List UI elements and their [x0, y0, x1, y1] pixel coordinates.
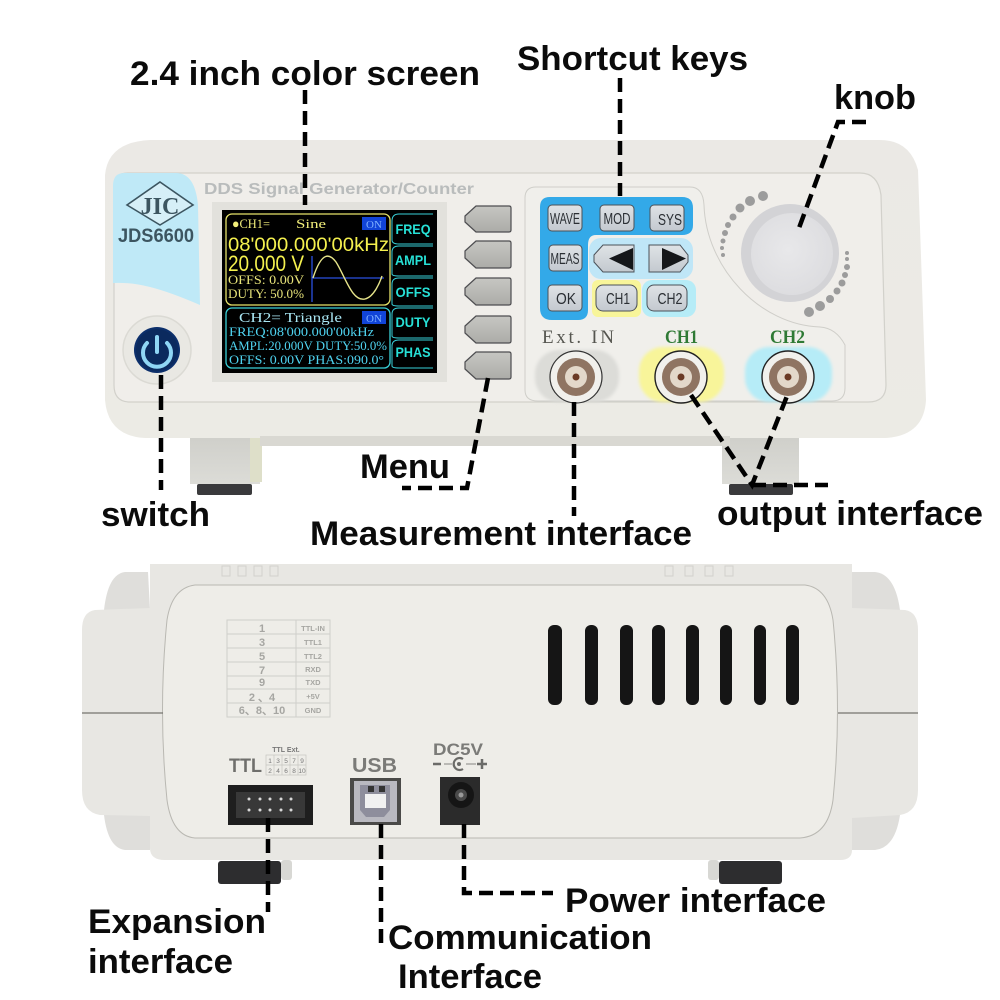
screen bezel — [212, 202, 447, 382]
key: CH1: CH1 — [606, 291, 630, 308]
on-screen menu labels: AMPL — [395, 252, 431, 268]
CH2 panel: ON — [366, 313, 382, 325]
key: WAVE — [548, 205, 582, 231]
logo diamond: JIC — [141, 194, 179, 220]
pin assignment table: TTL-IN — [301, 624, 325, 633]
pin assignment table: 3 — [259, 637, 265, 649]
pin assignment table: 9 — [259, 677, 265, 689]
callout: communication interface: Communication — [388, 919, 652, 957]
CH1 panel: ON — [366, 219, 382, 231]
on-screen menu labels: DUTY — [396, 314, 431, 330]
key: CH2 — [647, 285, 687, 311]
rear casing — [82, 564, 918, 860]
callout: power interface: Power interface — [565, 882, 826, 920]
rear panel — [162, 585, 838, 838]
TTL pin numbering grid: 10 — [298, 768, 306, 775]
TTL label: TTL — [229, 756, 262, 777]
pin assignment table — [227, 620, 330, 717]
knob scale dots — [720, 191, 850, 317]
key: right arrow — [649, 245, 688, 272]
key: SYS — [650, 205, 684, 231]
key: CH1 — [596, 285, 637, 311]
callout: expansion interface: interface — [88, 943, 233, 981]
USB port — [350, 778, 401, 825]
on-screen menu labels: OFFS — [396, 284, 430, 300]
pin assignment table: 7 — [259, 665, 265, 677]
TTL pin numbering grid — [266, 747, 306, 775]
rear corner bumpers — [104, 572, 900, 850]
CH1 BNC connector — [639, 347, 724, 403]
CH2 connector label: CH2 — [770, 327, 805, 348]
TTL pin numbering grid: 6 — [284, 768, 288, 775]
on-screen menu labels — [392, 214, 433, 368]
CH2 panel: FREQ:08'000.000'00kHz — [229, 324, 374, 339]
key: left arrow — [594, 245, 634, 272]
CH1 panel: 20.000 V — [228, 251, 304, 276]
knob and keypad recess outline — [525, 187, 845, 401]
callout: output interface: output interface — [717, 495, 983, 533]
key: MOD: MOD — [604, 211, 630, 228]
on-screen menu labels: FREQ — [396, 221, 431, 237]
CH1 panel: DUTY: 50.0% — [228, 286, 304, 301]
key: MEAS — [549, 245, 582, 271]
TTL pin numbering grid: 4 — [276, 768, 280, 775]
callout: power interface — [464, 824, 826, 920]
CH2 panel: CH2= Triangle — [239, 310, 342, 325]
callout: communication interface — [381, 824, 652, 996]
sine chart — [312, 256, 384, 302]
TTL pin numbering grid: 2 — [268, 768, 272, 775]
pin assignment table: 6、8、10 — [239, 705, 285, 717]
rear top vent tabs — [222, 566, 733, 576]
shortcut key block — [540, 197, 696, 320]
callout: expansion interface: Expansion — [88, 903, 266, 941]
DC power jack — [440, 777, 480, 825]
TTL pin numbering grid: 9 — [300, 758, 304, 765]
pin assignment table: 2 、4 — [249, 692, 276, 704]
callout: 2.4 inch color screen: 2.4 inch color screen — [130, 55, 480, 93]
Ext. IN label: Ext. IN — [542, 327, 614, 348]
rear view of the signal generator — [82, 564, 918, 884]
TTL pin numbering grid: TTL Ext. — [272, 747, 300, 754]
CH1 panel: Sine — [296, 216, 326, 231]
rear right foot — [708, 860, 782, 884]
USB label: USB — [352, 755, 397, 777]
pin assignment table: +5V — [306, 692, 320, 701]
pin assignment table: TTL1 — [304, 638, 322, 647]
callout: communication interface: Interface — [398, 958, 542, 996]
pin assignment table: GND — [305, 706, 322, 715]
device title: DDS Signal Generator/Counter — [204, 181, 474, 198]
callout: expansion interface — [88, 818, 268, 981]
callout: switch: switch — [101, 496, 210, 534]
CH1 panel: OFFS: 0.00V — [228, 272, 305, 287]
rear left foot — [218, 860, 292, 884]
DC5V label: DC5V — [433, 740, 484, 759]
TTL pin numbering grid: 8 — [292, 768, 296, 775]
CH2 panel — [226, 308, 390, 368]
CH1 connector label: CH1 — [665, 327, 698, 348]
callout: menu: Menu — [360, 448, 450, 486]
casing seam lines — [82, 712, 918, 714]
callout: knob: knob — [834, 79, 916, 117]
TTL pin numbering grid: 1 — [268, 758, 272, 765]
pin assignment table: TTL2 — [304, 652, 322, 661]
pin assignment table: 1 — [259, 623, 265, 635]
colour screen — [222, 210, 437, 373]
key: OK — [548, 285, 582, 311]
power button — [123, 316, 191, 384]
key: MOD — [600, 205, 634, 231]
right front foot — [722, 436, 799, 495]
CH1 panel: ●CH1= — [232, 216, 270, 231]
Ext. IN BNC connector — [535, 350, 619, 403]
model name: JDS6600 — [118, 226, 194, 247]
front view of the signal generator — [105, 140, 926, 495]
rotary knob — [720, 191, 850, 317]
CH2 BNC connector — [745, 347, 832, 403]
key: OK: OK — [556, 291, 576, 308]
pin assignment table: TXD — [306, 678, 321, 687]
callout: shortcut keys: Shortcut keys — [517, 40, 748, 78]
CH1 panel — [226, 214, 390, 305]
TTL expansion connector — [228, 785, 313, 825]
callout: menu — [360, 378, 488, 488]
blue logo area — [113, 173, 200, 305]
key: MEAS: MEAS — [550, 251, 580, 268]
left front foot — [190, 436, 262, 495]
front casing — [105, 140, 926, 438]
callout: knob — [799, 79, 916, 228]
CH1 panel: 08'000.000'00kHz — [228, 235, 389, 256]
pin assignment table: RXD — [305, 665, 321, 674]
ventilation slots — [548, 625, 799, 705]
TTL pin numbering grid: 5 — [284, 758, 288, 765]
callout: output interface — [691, 395, 983, 533]
pin assignment table: 5 — [259, 651, 265, 663]
front panel — [114, 173, 886, 402]
menu soft keys — [465, 206, 511, 379]
key: CH2: CH2 — [658, 291, 683, 308]
on-screen menu labels: PHAS — [396, 344, 430, 360]
TTL pin numbering grid: 7 — [292, 758, 296, 765]
callout: measurement interface: Measurement interface — [310, 515, 692, 553]
CH2 panel: AMPL:20.000V DUTY:50.0% — [229, 338, 387, 353]
TTL pin numbering grid: 3 — [276, 758, 280, 765]
key: WAVE: WAVE — [550, 211, 580, 228]
CH2 panel: OFFS: 0.00V PHAS:090.0° — [229, 352, 384, 367]
key: SYS: SYS — [658, 212, 682, 229]
DC polarity symbol — [433, 758, 487, 770]
